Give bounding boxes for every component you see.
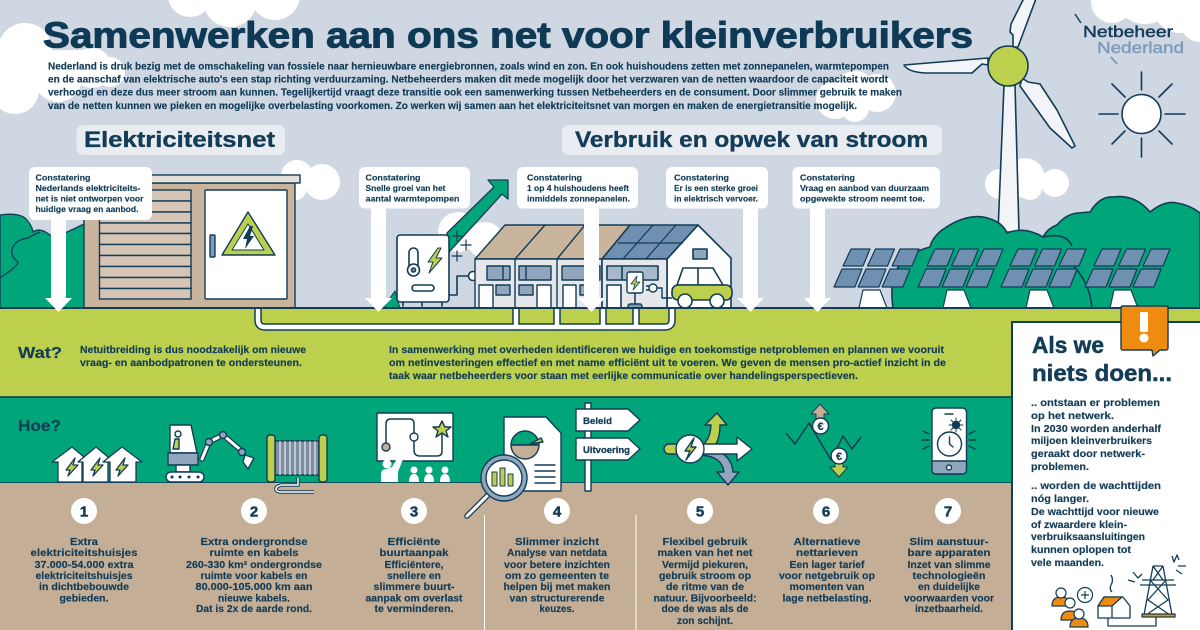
- callout: constatering 5: Constatering: [800, 174, 855, 182]
- icon: house with solar: [1098, 575, 1156, 626]
- wat text middle: taak waar netbeheerders voor staan met eerlijke communicatie over handelingsperspectieven.: [389, 371, 858, 382]
- bushes right: [892, 197, 1200, 308]
- callout: constatering 3: 1 op 4 huishoudens heeft: [527, 184, 629, 193]
- step 4: om zo gemeenten te: [505, 571, 610, 582]
- step 1: 1: [80, 504, 88, 520]
- step 5: Vermijd piekuren,: [662, 560, 748, 571]
- sky background: [0, 0, 1200, 310]
- step 5: [654, 498, 756, 627]
- intro text: van de netten kunnen we pieken en mogelijke overbelasting voorkomen. Zo werken wij samen aan het elektriciteitsnet van morgen en maken de energietransitie mogelijk.: [48, 101, 857, 112]
- panel text: problemen: problemen.: [1031, 462, 1089, 473]
- callout: constatering 5: Vraag en aanbod van duurzaam: [800, 184, 929, 193]
- warning sign: [222, 212, 275, 255]
- callout: constatering 5: opgewekte stroom neemt toe.: [800, 194, 925, 204]
- panel heading: niets doen...: [1032, 360, 1172, 386]
- callout: constatering 4: in elektrisch vervoer.: [674, 194, 758, 204]
- title: Samenwerken aan ons net voor kleinverbruikers: [43, 14, 973, 56]
- icon: cable reel: [267, 435, 327, 492]
- step 3: snellere en: [387, 571, 441, 582]
- tree left: [0, 214, 84, 308]
- panel text: wachttijden: De wachttijd voor nieuwe: [1031, 507, 1159, 518]
- step 3: aanpak om overlast: [366, 594, 463, 604]
- step 7: 7: [944, 504, 952, 520]
- icon: flexible use arrows: [664, 413, 752, 485]
- step 3: Efficiëntere,: [384, 560, 444, 571]
- icon: power pylon: [1128, 555, 1186, 617]
- step 2: nieuwe kabels.: [218, 594, 290, 604]
- callout: constatering 4: [666, 167, 768, 312]
- step 4: Slimmer inzicht: [515, 537, 600, 548]
- wat text left: vraag- en aanbodpatronen te ondersteunen.: [80, 358, 302, 369]
- icon: signpost: Beleid: [583, 416, 612, 426]
- intro text: Nederland is druk bezig met de omschakeling van fossiele naar hernieuwbare energiebronnen, zoals wind en zon. En ook huishoudens zetten met zonnepanelen, warmtepompen: [48, 62, 889, 72]
- icon: smart phone: [922, 408, 976, 474]
- tan roofs: [475, 225, 630, 259]
- cabinet door: [205, 190, 287, 299]
- callout: constatering 3: Constatering: [527, 174, 582, 182]
- callout: constatering 1: Constatering: [36, 174, 91, 182]
- wat text middle: om netinvesteringen effectief en met name efficiënt uit te voeren. We geven de mensen pro-actief inzicht in de: [389, 358, 947, 369]
- icon: report with magnifier: [467, 417, 561, 516]
- panel text: wachttijden: .. worden de wachttijden: [1031, 481, 1161, 492]
- logo Netbeheer Nederland: Netbeheer: [1083, 24, 1174, 41]
- step 6: 6: [822, 504, 830, 520]
- wat text middle: In samenwerking met overheden identificeren we huidige en toekomstige netproblemen en plannen we vooruit: [389, 345, 945, 356]
- panel text: problemen: geraakt door netwerk-: [1031, 449, 1145, 460]
- step 4: van structurerende: [510, 594, 605, 604]
- step 1: 37.000-54.000 extra: [34, 560, 134, 571]
- step 6: Alternatieve: [794, 537, 861, 548]
- step 4: voor betere inzichten: [504, 560, 610, 571]
- step 1: elektriciteitshuisjes: [30, 548, 138, 559]
- logo Netbeheer Nederland: [1075, 14, 1184, 64]
- small tree behind heat pump: [383, 291, 400, 308]
- step 6: nettarieven: [796, 548, 858, 559]
- callout: constatering 3: [517, 167, 638, 312]
- panel heading: [1032, 332, 1172, 386]
- callout: constatering 3: inmiddels zonnepanelen.: [527, 194, 630, 204]
- icon: tariff zigzag: €: [817, 421, 824, 433]
- step 7: en duidelijke: [918, 582, 981, 593]
- icon: people: [1052, 588, 1092, 627]
- callout: constatering 4: Er is een sterke groei: [674, 184, 758, 193]
- wat text left: [80, 345, 307, 369]
- icon: presentation board: [377, 413, 453, 482]
- step 1: elektriciteitshuisjes: [36, 571, 133, 582]
- icon: excavator: [166, 425, 254, 482]
- charging post: [627, 272, 672, 308]
- step 7: voorwaarden voor: [904, 594, 994, 604]
- step 5: natuur. Bijvoorbeeld:: [654, 594, 756, 604]
- green growth arrow: [447, 180, 508, 252]
- heading: Elektriciteitsnet: [76, 125, 285, 155]
- step 7: inzetbaarheid.: [915, 604, 983, 615]
- step 7: technologieën: [912, 571, 986, 582]
- callout: constatering 5: [792, 167, 940, 312]
- step 5: maken van het net: [658, 548, 753, 559]
- column dividers: [484, 515, 636, 630]
- icon: orange warning bubble: [1121, 306, 1168, 356]
- step 2: ruimte en kabels: [210, 548, 299, 559]
- step 5: gebruik stroom op: [659, 571, 751, 582]
- panel heading: Als we: [1032, 332, 1104, 358]
- heading: Verbruik en opwek van stroom: Verbruik en opwek van stroom: [575, 127, 928, 152]
- step 7: bare apparaten: [908, 548, 991, 559]
- underground cable: [258, 309, 672, 327]
- panel text: wachttijden: vele maanden.: [1031, 558, 1104, 569]
- label: Wat?: Wat?: [18, 345, 62, 362]
- step 5: de ritme van de: [666, 582, 745, 593]
- logo Netbeheer Nederland: Nederland: [1097, 40, 1184, 57]
- callout: constatering 2: aantal warmtepompen: [366, 194, 460, 204]
- step 6: lage netbelasting.: [782, 594, 872, 604]
- label: Hoe?: Hoe?: [18, 418, 61, 435]
- heading: Elektriciteitsnet: Elektriciteitsnet: [84, 127, 276, 152]
- panel text: problemen: In 2030 worden anderhalf: [1031, 424, 1162, 435]
- icon: tariff zigzag: €: [836, 451, 842, 463]
- heat pump: [397, 231, 483, 306]
- ground line: [0, 307, 1200, 309]
- callout: constatering 4: Constatering: [674, 174, 729, 182]
- step 1: Extra: [70, 537, 99, 548]
- step 2: 80.000-105.000 km aan: [196, 582, 313, 593]
- tan band: [0, 483, 1200, 630]
- electric car: [672, 268, 732, 308]
- icon: tariff zigzag: [786, 404, 861, 477]
- step 3: Efficiënte: [388, 537, 441, 548]
- callout: constatering 1: huidige vraag en aanbod.: [36, 205, 138, 214]
- solar field: [834, 249, 1170, 308]
- callout: constatering 1: [29, 167, 152, 312]
- door handle: [210, 235, 215, 257]
- callout: constatering 1: net is niet ontworpen voor: [36, 194, 144, 204]
- step 2: ruimte voor kabels en: [200, 571, 308, 582]
- step 3: slimmere buurt-: [374, 582, 454, 593]
- intro text: verhoogd en deze dus meer stroom aan kunnen. Tegelijkertijd vraagt deze transitie ook een samenwerking tussen Netbeheerders en de consument. Door slimmer gebruik te maken: [48, 88, 902, 98]
- ground: wat band: [0, 308, 1200, 398]
- step 1: [30, 498, 138, 604]
- panel text: problemen: .. ontstaan er problemen: [1031, 398, 1160, 409]
- step 2: 2: [250, 504, 258, 520]
- step 2: 260-330 km² ondergrondse: [186, 560, 323, 571]
- step 5: Flexibel gebruik: [662, 537, 748, 548]
- step 7: Inzet van slimme: [908, 560, 991, 571]
- step 6: [779, 498, 875, 604]
- step 5: 5: [696, 504, 704, 520]
- step 3: 3: [410, 504, 418, 520]
- step 2: Extra ondergrondse: [200, 537, 308, 548]
- panel text: problemen: [1031, 398, 1162, 473]
- panel text: wachttijden: verbruiksaansluitingen: [1031, 532, 1145, 543]
- callout: constatering 1: Nederlands elektriciteits-: [36, 184, 141, 193]
- row houses: [475, 225, 630, 308]
- heading: Verbruik en opwek van stroom: [562, 125, 942, 155]
- panel: als we niets doen: [1012, 306, 1200, 630]
- step 5: zon schijnt.: [677, 616, 733, 627]
- step 3: te verminderen.: [374, 604, 454, 615]
- step 1: gebieden.: [60, 594, 109, 604]
- louvres: [100, 190, 191, 299]
- step 7: [904, 498, 994, 615]
- icon: transformer huts: [52, 447, 142, 482]
- step 5: doe de was als de: [662, 604, 749, 615]
- step 4: 4: [553, 504, 562, 520]
- step 1: in dichtbebouwde: [39, 582, 130, 593]
- step 7: Slim aanstuur-: [910, 537, 988, 548]
- step 6: voor netgebruik op: [779, 571, 875, 582]
- step 4: Analyse van netdata: [507, 548, 608, 559]
- clouds: [0, 0, 1200, 258]
- callout: constatering 2: [359, 167, 470, 312]
- step 4: [504, 498, 611, 615]
- icon: signpost: Uitvoering: [583, 445, 630, 455]
- step 3: buurtaanpak: [380, 548, 449, 559]
- panel text: wachttijden: of zwaardere klein-: [1031, 520, 1127, 531]
- wat text left: Netuitbreiding is dus noodzakelijk om nieuwe: [80, 345, 307, 356]
- step 4: keuzes.: [540, 604, 575, 615]
- panel text: problemen: miljoen kleinverbruikers: [1031, 436, 1152, 447]
- step 2: Dat is 2x de aarde rond.: [196, 604, 312, 615]
- panel text: wachttijden: [1031, 481, 1161, 569]
- panel text: wachttijden: kunnen oplopen tot: [1031, 545, 1132, 556]
- callout: constatering 2: Snelle groei van het: [366, 184, 446, 193]
- house with solar roof: [602, 225, 731, 308]
- icon: sun: [1099, 72, 1185, 157]
- step 6: momenten van: [790, 582, 865, 593]
- callout: constatering 2: Constatering: [366, 174, 421, 182]
- transformer cabinet: [84, 175, 300, 308]
- intro text: [48, 62, 902, 112]
- panel text: problemen: op het netwerk.: [1031, 411, 1114, 422]
- icon: signpost: [576, 403, 640, 491]
- icon: wind turbine: [904, 0, 1075, 232]
- step 3: [366, 498, 463, 615]
- step 2: [186, 498, 323, 615]
- step 6: Een lager tarief: [790, 560, 865, 571]
- hoe band: [0, 397, 1200, 483]
- intro text: en de aanschaf van elektrische auto's een stap richting verduurzaming. Netbeheerders maken dit mede mogelijk door het verzwaren van de netten waardoor de capaciteit wordt: [48, 74, 889, 86]
- wat text middle: [389, 345, 947, 382]
- step 4: helpen bij met maken: [504, 582, 611, 593]
- panel text: wachttijden: nóg langer.: [1031, 494, 1089, 505]
